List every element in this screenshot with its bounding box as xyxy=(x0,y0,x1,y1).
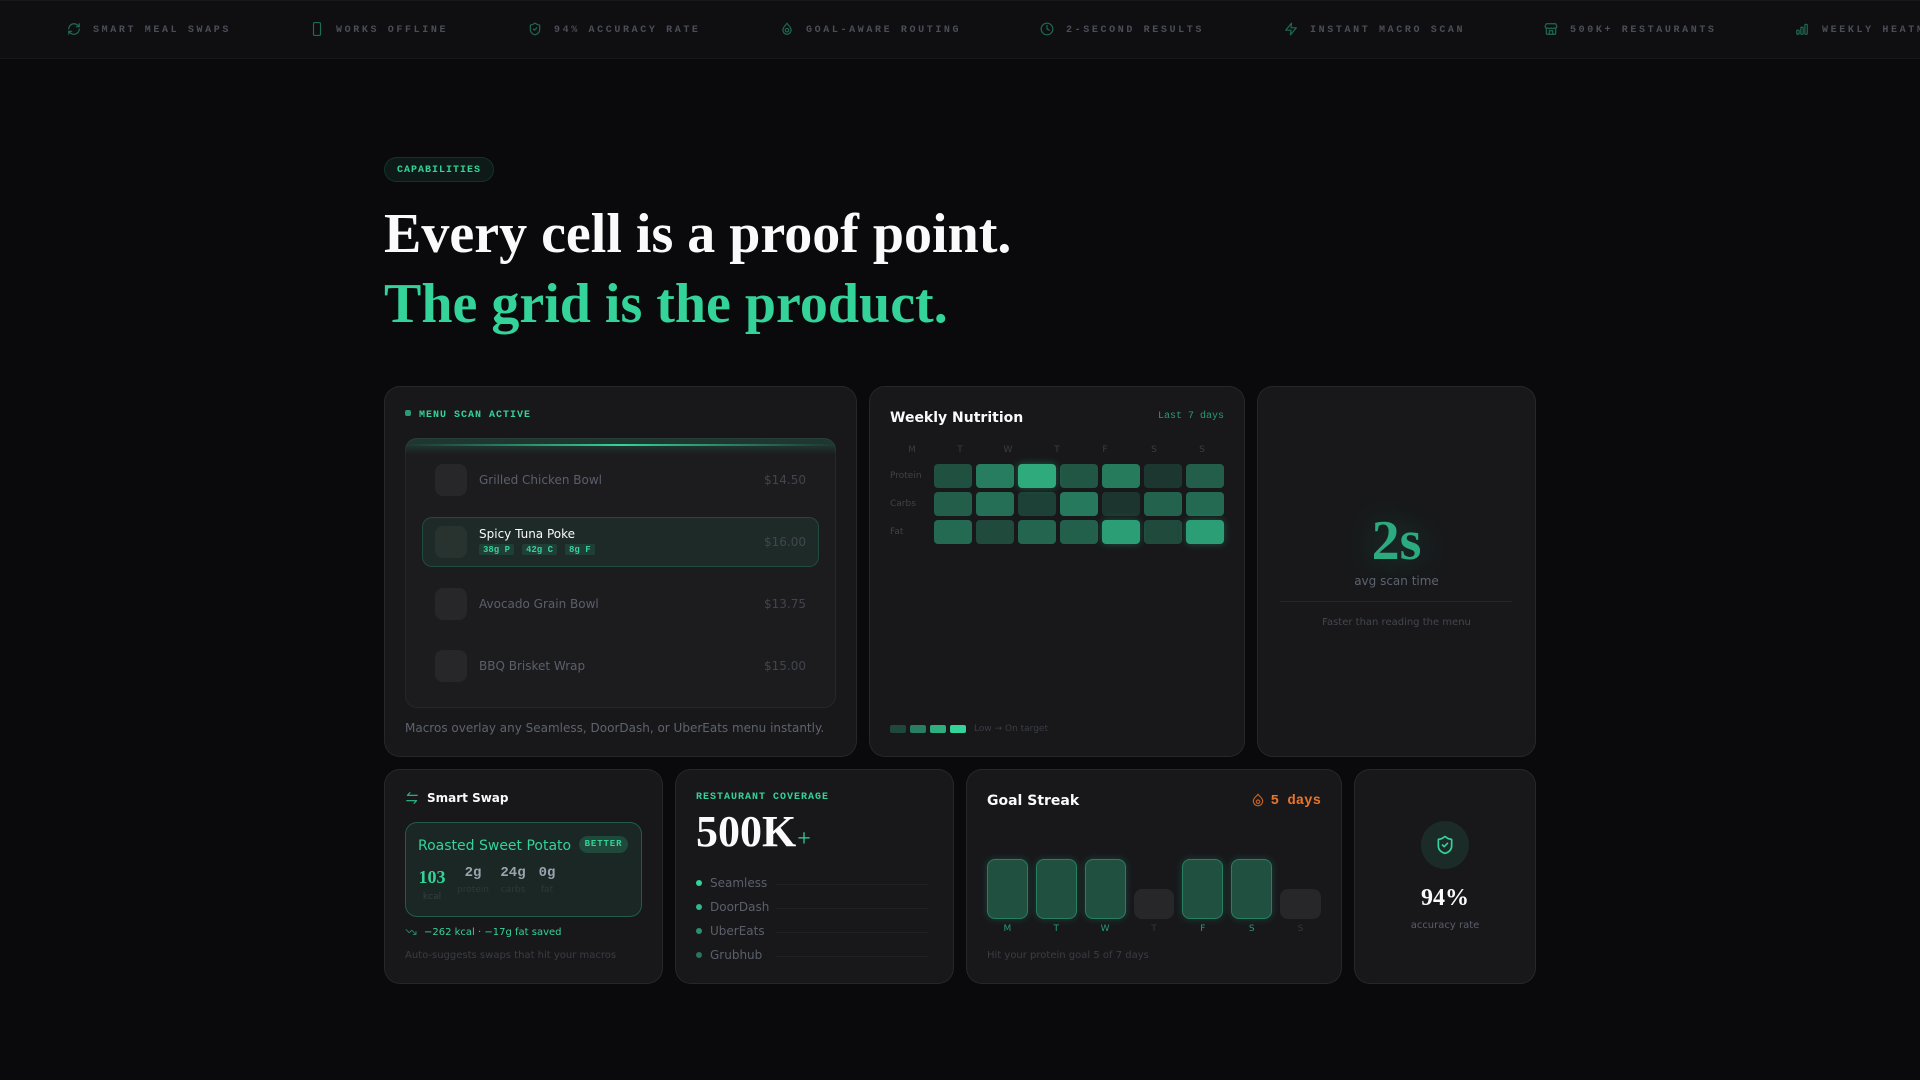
panel: accuracy xyxy=(1354,769,1536,984)
list: seamless: Seamless xyxy=(710,876,767,890)
fat stat: 0g xyxy=(539,865,555,881)
protein stat: 2g xyxy=(465,865,481,881)
menu item: spicy tuna poke highlighted: $16.00 xyxy=(764,535,806,549)
row label: carbs: Carbs xyxy=(890,499,916,509)
heading xyxy=(384,203,1011,335)
kcal stat xyxy=(418,867,446,902)
capabilities badge: CAPABILITIES xyxy=(397,165,481,176)
kcal stat: kcal xyxy=(423,892,441,902)
icon: shield check xyxy=(1421,821,1469,869)
protein stat: protein xyxy=(457,885,489,895)
menu item: spicy tuna poke highlighted xyxy=(422,517,819,567)
scan line xyxy=(405,438,836,454)
protein stat xyxy=(457,865,489,895)
status label: MENU SCAN ACTIVE xyxy=(419,410,531,421)
menu item: bbq brisket wrap xyxy=(435,650,806,682)
menu item: grilled chicken bowl xyxy=(435,464,806,496)
title: Goal Streak xyxy=(987,793,1079,809)
swap name: Roasted Sweet Potato xyxy=(418,838,571,854)
icon: swap arrows xyxy=(406,792,418,804)
stat label: avg scan time xyxy=(1354,574,1439,588)
day labels: S xyxy=(1151,445,1157,455)
list: doordash xyxy=(696,900,928,914)
swap suggestion box xyxy=(405,822,642,917)
menu item: grilled chicken bowl: $14.50 xyxy=(764,473,806,487)
heading: The grid is the product. xyxy=(384,273,948,335)
stat note: Faster than reading the menu xyxy=(1322,617,1471,628)
label: RESTAURANT COVERAGE xyxy=(696,792,829,803)
menu item: grilled chicken bowl: Grilled Chicken Bowl xyxy=(479,473,602,487)
menu item: spicy tuna poke highlighted: Spicy Tuna Poke xyxy=(479,527,575,541)
streak bars xyxy=(984,856,1321,934)
panel: menu scan xyxy=(384,386,857,757)
streak bars: T xyxy=(1151,924,1157,934)
streak bars: M xyxy=(1004,924,1011,934)
list: seamless xyxy=(696,876,928,890)
panel: weekly nutrition heatmap xyxy=(869,386,1245,757)
menu item: spicy tuna poke highlighted: 8g F xyxy=(569,545,591,555)
ticker: accuracy rate: 94% ACCURACY RATE xyxy=(554,25,701,36)
streak bars: S xyxy=(1298,924,1303,934)
streak bars: S xyxy=(1249,924,1255,934)
legend: Low → On target xyxy=(974,724,1048,734)
ticker: accuracy rate xyxy=(530,22,701,36)
status dot xyxy=(405,410,411,416)
capabilities badge xyxy=(384,157,494,182)
panel: smart swap xyxy=(384,769,663,984)
menu item: avocado grain bowl: Avocado Grain Bowl xyxy=(479,597,599,611)
menu list xyxy=(405,438,836,708)
heatmap grid xyxy=(934,460,1228,548)
caption: Macros overlay any Seamless, DoorDash, or UberEats menu instantly. xyxy=(405,721,824,735)
panel: scan time stat xyxy=(1257,386,1536,757)
menu item: bbq brisket wrap: $15.00 xyxy=(764,659,806,673)
better badge xyxy=(579,836,628,853)
day labels: T xyxy=(957,445,963,455)
list: ubereats: UberEats xyxy=(710,924,765,938)
ticker: 2-second results: 2-SECOND RESULTS xyxy=(1066,25,1204,36)
day labels: F xyxy=(1102,445,1108,455)
fat stat: fat xyxy=(541,885,553,895)
ticker: 2-second results xyxy=(1040,22,1204,36)
savings text: −262 kcal · −17g fat saved xyxy=(424,927,562,938)
big number: 500K+ xyxy=(696,807,811,856)
menu item: spicy tuna poke highlighted: 42g C xyxy=(526,545,553,555)
list: ubereats xyxy=(696,924,928,938)
icon: flame xyxy=(1252,794,1264,806)
day labels: M xyxy=(908,445,916,455)
streak count: 5 days xyxy=(1271,793,1321,809)
panel: restaurant coverage xyxy=(675,769,954,984)
ticker: instant macro scan: INSTANT MACRO SCAN xyxy=(1310,25,1465,36)
ticker: restaurants: 500K+ RESTAURANTS xyxy=(1570,25,1717,36)
top ticker bar xyxy=(0,0,1920,59)
list: grubhub: Grubhub xyxy=(710,948,762,962)
accuracy stat: 94% xyxy=(1421,885,1469,911)
ticker: works offline xyxy=(312,22,448,36)
fat stat xyxy=(539,865,555,895)
day labels: W xyxy=(1004,445,1012,455)
big stat: 2s xyxy=(1372,510,1421,572)
caption: Auto-suggests swaps that hit your macros xyxy=(405,950,616,961)
kcal stat: 103 xyxy=(418,867,446,887)
better badge: BETTER xyxy=(585,839,622,849)
carbs stat xyxy=(500,865,526,895)
streak bars: W xyxy=(1101,924,1110,934)
ticker: weekly heatmaps xyxy=(1796,24,1920,36)
menu item: avocado grain bowl xyxy=(435,588,806,620)
menu item: spicy tuna poke highlighted: 38g P xyxy=(483,545,510,555)
menu item: bbq brisket wrap: BBQ Brisket Wrap xyxy=(479,659,585,673)
caption: Hit your protein goal 5 of 7 days xyxy=(987,950,1149,961)
carbs stat: 24g xyxy=(500,865,526,881)
icon: trending down xyxy=(406,929,416,935)
title: Weekly Nutrition xyxy=(890,410,1023,426)
row label: fat: Fat xyxy=(890,527,903,537)
range label: Last 7 days xyxy=(1158,411,1224,422)
streak bars: F xyxy=(1200,924,1205,934)
legend xyxy=(890,724,1048,734)
list: doordash: DoorDash xyxy=(710,900,769,914)
menu item: avocado grain bowl: $13.75 xyxy=(764,597,806,611)
day labels xyxy=(908,445,1205,455)
heading: Every cell is a proof point. xyxy=(384,203,1011,265)
day labels: T xyxy=(1054,445,1060,455)
panel: goal streak xyxy=(966,769,1342,984)
day labels: S xyxy=(1199,445,1205,455)
ticker: goal-aware routing: GOAL-AWARE ROUTING xyxy=(806,25,961,36)
streak bars: T xyxy=(1054,924,1059,934)
accuracy label: accuracy rate xyxy=(1411,920,1479,931)
list: grubhub xyxy=(696,948,928,962)
title: Smart Swap xyxy=(427,791,508,805)
carbs stat: carbs xyxy=(501,885,525,895)
ticker: works offline: WORKS OFFLINE xyxy=(336,25,448,36)
divider xyxy=(1280,601,1512,602)
row label: protein: Protein xyxy=(890,471,922,481)
ticker: smart meal swaps: SMART MEAL SWAPS xyxy=(93,25,231,36)
